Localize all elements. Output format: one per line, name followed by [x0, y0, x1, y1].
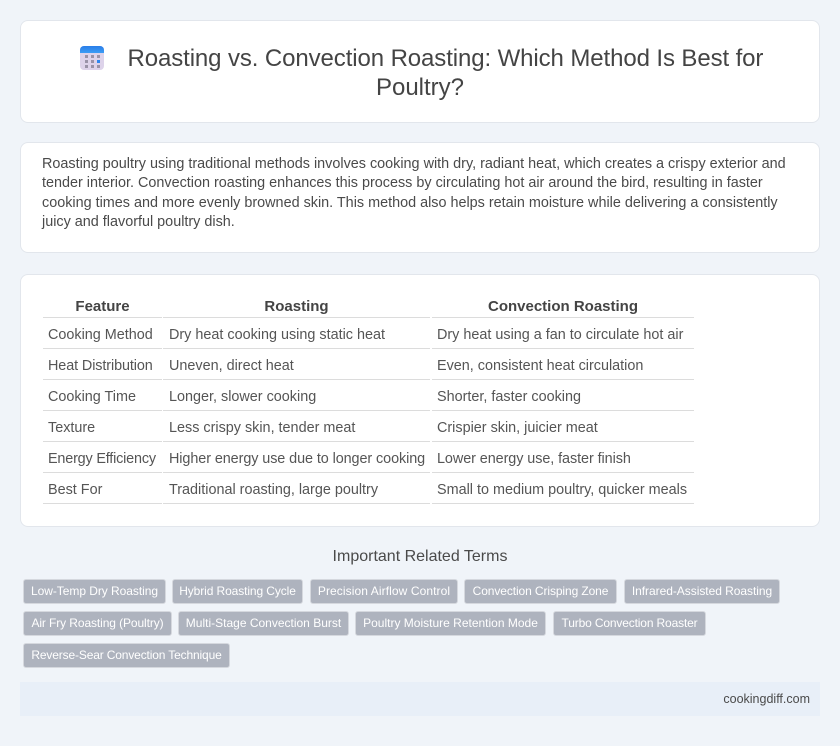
tag [172, 579, 303, 604]
row: Texture: Crispier skin, juicier meat [437, 420, 598, 436]
row: Cooking Time [48, 389, 581, 405]
row: Texture: Texture [48, 420, 95, 436]
heading: related terms: Important Related Terms [333, 548, 507, 565]
tag: Convection Crisping Zone [473, 584, 608, 598]
title [128, 45, 763, 101]
tag [624, 579, 780, 604]
row: Energy Efficiency [48, 451, 631, 467]
title: Roasting vs. Convection Roasting: Which Method Is Best for [128, 45, 763, 72]
column heading: Feature: Feature [75, 298, 130, 315]
row: Best For [48, 482, 687, 498]
row: Texture [48, 420, 598, 436]
related terms tags [23, 579, 780, 668]
row: Cooking Method [48, 327, 684, 343]
row: Best For: Best For [48, 482, 102, 498]
tag [178, 611, 349, 636]
tag [23, 579, 166, 604]
tag: Low-Temp Dry Roasting [31, 584, 158, 598]
intro text [42, 156, 786, 230]
intro text: juicy and flavorful poultry dish. [42, 214, 235, 230]
row: Best For: Small to medium poultry, quicker meals [437, 482, 687, 498]
tag [464, 579, 617, 604]
tag: Air Fry Roasting (Poultry) [31, 616, 164, 630]
tag: Reverse-Sear Convection Technique [31, 648, 222, 662]
row: Texture: Less crispy skin, tender meat [169, 420, 355, 436]
row: Cooking Time: Cooking Time [48, 389, 136, 405]
tag [553, 611, 706, 636]
panel: comparison table [20, 274, 820, 527]
intro text: tender interior. Convection roasting enhances this process by circulating hot air around the bird, resulting in faster [42, 175, 763, 191]
title: Poultry? [376, 74, 464, 101]
row: Cooking Method: Dry heat using a fan to circulate hot air [437, 327, 683, 343]
row: Energy Efficiency: Lower energy use, faster finish [437, 451, 631, 467]
footer credit: cookingdiff.com [723, 692, 810, 706]
row: Cooking Method: Dry heat cooking using static heat [169, 327, 385, 343]
row: Cooking Time: Longer, slower cooking [169, 389, 316, 405]
row: Heat Distribution: Heat Distribution [48, 358, 153, 374]
row: Best For: Traditional roasting, large poultry [169, 482, 378, 498]
panel: introduction [20, 142, 820, 253]
column heading: Convection Roasting: Convection Roasting [488, 298, 638, 315]
tag [310, 579, 458, 604]
intro text: Roasting poultry using traditional methods involves cooking with dry, radiant heat, which creates a crispy exterior and [42, 156, 786, 172]
comparison table [43, 298, 694, 504]
row: Cooking Time: Shorter, faster cooking [437, 389, 581, 405]
tag [355, 611, 546, 636]
row: Heat Distribution [48, 358, 643, 374]
row: Energy Efficiency: Higher energy use due to longer cooking [169, 451, 425, 467]
row: Heat Distribution: Uneven, direct heat [169, 358, 294, 374]
tag [23, 643, 230, 668]
tag: Infrared-Assisted Roasting [632, 584, 772, 598]
intro text: cooking times and more evenly browned skin. This method also helps retain moisture while delivering a consistently [42, 195, 778, 211]
tag: Precision Airflow Control [318, 584, 450, 598]
icon: calendar [80, 46, 104, 70]
tag: Turbo Convection Roaster [561, 616, 698, 630]
tag: Hybrid Roasting Cycle [179, 584, 296, 598]
row: Energy Efficiency: Energy Efficiency [48, 451, 156, 467]
row: Heat Distribution: Even, consistent heat circulation [437, 358, 643, 374]
footer bar [20, 682, 820, 716]
tag: Multi-Stage Convection Burst [186, 616, 341, 630]
tag: Poultry Moisture Retention Mode [363, 616, 538, 630]
row: Cooking Method: Cooking Method [48, 327, 153, 343]
column heading: Roasting: Roasting [264, 298, 329, 315]
panel: header [20, 20, 820, 123]
tag [23, 611, 172, 636]
